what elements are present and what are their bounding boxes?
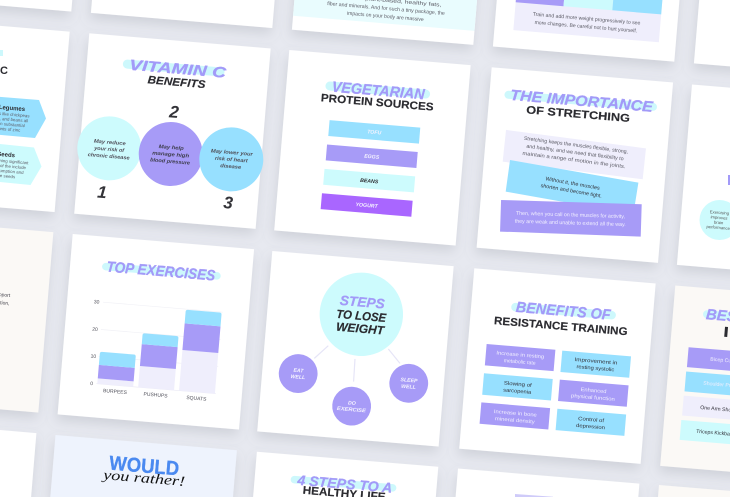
circle 2: [136, 119, 205, 189]
bar chart: PUSHUPS: [143, 391, 168, 400]
circle 1: May reduce: [94, 139, 126, 147]
card: nuts and seeds partial: fiber and minerals. And for such a tiny package, the: [327, 1, 445, 17]
card: progressive training partial: Train and add more weight progressively to see: [532, 12, 641, 27]
box: depression: [556, 409, 626, 436]
card: nuts and seeds partial: [292, 0, 488, 45]
text: beige card partial: [0, 291, 11, 307]
circle: do exercise: EXERCISE: [337, 406, 367, 414]
box 1: [502, 130, 647, 179]
card: zinc sources partial left: C: [0, 65, 8, 77]
card: vitamin c benefits: [72, 33, 273, 229]
card: importance of stretching: [477, 67, 673, 263]
main circle: [316, 269, 406, 359]
bar chart: SQUATS: [186, 395, 207, 403]
arrow left: [314, 345, 328, 359]
circle: eat well: WELL: [290, 374, 305, 381]
card: progressive training partial: [493, 0, 689, 62]
heading: WOULD: [108, 453, 180, 480]
number 2: 2: [168, 102, 180, 122]
arrow middle: [353, 359, 355, 382]
title highlight: [290, 476, 397, 492]
circle 2: manage high: [152, 150, 189, 160]
box: physical function: Enhanced: [580, 387, 607, 395]
circle 1: chronic disease: [87, 152, 130, 162]
bar chart: [86, 299, 223, 403]
title: THE IMPORTANCE: [510, 87, 655, 116]
title highlight: [511, 303, 616, 320]
card: would you rather: [50, 435, 237, 497]
bar: yogurt: YOGURT: [355, 202, 379, 210]
box: metabolic rate: metabolic rate: [503, 358, 536, 367]
main circle: TO LOSE: [336, 307, 388, 325]
box: sarcopenia: sarcopenia: [503, 388, 531, 396]
box: metabolic rate: Increase in resting: [496, 350, 544, 360]
card: progressive training partial: more changes. Be careful not to hurt yourself.: [534, 20, 637, 34]
box: bone density: mineral density: [495, 416, 535, 425]
card: steps to lose weight: [257, 251, 454, 447]
subtitle: RESISTANCE TRAINING: [493, 315, 628, 338]
subtitle: OF STRETCHING: [526, 104, 630, 125]
card: vegetarian protein sources: [274, 50, 471, 246]
circle: sleep well: WELL: [401, 384, 416, 391]
circle: do exercise: DO: [348, 400, 356, 407]
card: bottom-right partial: [658, 485, 730, 497]
box 2: Without it, the muscles: [545, 176, 601, 192]
box: sarcopenia: Slowing of: [504, 381, 533, 389]
circle: eat well: EAT: [293, 368, 304, 375]
card: top-left partial: [0, 0, 86, 12]
box: resting systolic: resting systolic: [576, 364, 615, 373]
box 1: and healthy, and we need that flexibility to: [526, 144, 624, 162]
circle 2: blood pressure: [150, 157, 190, 167]
row: one arm: [682, 396, 730, 428]
card: top exercises: [58, 234, 254, 430]
card: top partial: [91, 0, 287, 28]
circle: brain performance: [700, 200, 730, 240]
box: depression: depression: [576, 423, 605, 431]
number 3: 3: [223, 193, 234, 213]
text: brain performance: performance: [706, 224, 730, 231]
circle: sleep well: [388, 362, 430, 404]
bar: tofu: TOFU: [367, 129, 382, 136]
row: shoulder: [685, 372, 730, 404]
title fragment: [515, 494, 553, 497]
card: bottom partial: [456, 468, 639, 497]
box: metabolic rate: [485, 344, 555, 371]
title highlight: [123, 59, 225, 77]
circle 3: disease: [220, 163, 241, 171]
title highlight: [325, 81, 430, 99]
title: TOP EXERCISES: [106, 259, 216, 285]
title: BENEFITS OF: [515, 299, 612, 324]
script heading: you rather!: [100, 468, 186, 490]
bar: yogurt: [321, 193, 413, 217]
bar chart: 0: [90, 381, 94, 387]
box: resting systolic: Improvement in: [574, 357, 618, 367]
card: benefits of resistance training: [459, 268, 656, 464]
main circle: WEIGHT: [336, 320, 386, 338]
arrow right: [387, 349, 401, 363]
hexagon: seeds: [0, 143, 42, 185]
card: white partial bottom-left: [0, 430, 36, 497]
box: depression: Control of: [578, 416, 605, 424]
box 2: [505, 160, 639, 215]
box: bone density: [480, 402, 550, 430]
circle 2: May help: [159, 144, 184, 152]
subtitle: PROTEIN SOURCES: [320, 92, 434, 114]
box 3: Then, when you call on the muscles for activity,: [516, 211, 625, 220]
bar chart: 20: [92, 327, 98, 333]
partial title: [728, 175, 730, 185]
card: top-right partial exercising: [677, 84, 730, 280]
circle 3: May lower your: [211, 148, 254, 158]
bar: eggs: EGGS: [364, 154, 380, 161]
circle 1: [75, 114, 144, 183]
card: top-right partial: [694, 0, 730, 79]
box: physical function: physical function: [571, 393, 615, 403]
box 2: shorten and become tight.: [540, 183, 602, 200]
bar chart: 10: [90, 354, 97, 360]
box: physical function: [558, 380, 629, 407]
box 3: [498, 193, 643, 243]
main circle: STEPS: [339, 293, 385, 312]
title: VITAMIN C: [129, 57, 228, 82]
card: nuts and seeds partial: impacts on your body are massive: [347, 11, 424, 23]
row: triceps: [680, 420, 730, 452]
card: 4 steps to a healthy life: [253, 452, 438, 497]
circle: eat well: [277, 353, 319, 395]
bar: tofu: [328, 120, 420, 144]
number 1: 1: [97, 183, 108, 202]
text: brain performance: improves: [710, 214, 728, 221]
text: brain performance: [706, 209, 730, 231]
hexagon: legumes: [0, 96, 46, 138]
box: bone density: Increase in bone: [494, 409, 537, 419]
box: resting systolic: [560, 351, 631, 378]
title: VEGETARIAN: [331, 79, 426, 103]
text: legumes: [0, 104, 31, 133]
text: seeds: [0, 151, 30, 180]
circle 1: your risk of: [93, 146, 126, 154]
title: 4 STEPS TO A: [296, 472, 393, 496]
circle: sleep well: SLEEP: [400, 377, 418, 385]
subtitle: BENEFITS: [147, 74, 207, 91]
bar: beans: [323, 169, 415, 192]
bar chart: BURPEES: [103, 388, 128, 396]
title highlight: [703, 310, 730, 328]
box 1: maintain a range of motion in the joints.: [522, 151, 626, 170]
card: best exercises partial right: [660, 286, 730, 481]
title highlight: [102, 263, 221, 280]
text: brain performance: brain: [714, 220, 724, 225]
card: beige partial left: [0, 217, 53, 413]
bar: eggs: [326, 144, 418, 168]
bar chart: 30: [94, 299, 100, 306]
circle 3: risk of heart: [215, 156, 248, 164]
box 1: Stretching keeps the muscles flexible, strong,: [523, 136, 628, 155]
bar: beans: BEANS: [360, 178, 379, 185]
title highlight: [504, 90, 657, 111]
row: bicep: [687, 347, 730, 379]
text: brain performance: Exercising: [710, 209, 730, 216]
box: sarcopenia: [482, 373, 553, 400]
card: zinc sources partial left: [0, 16, 70, 212]
circle: do exercise: [331, 385, 373, 427]
box 3: they are weak and unable to extend all the way.: [515, 219, 626, 228]
circle 3: [197, 125, 266, 194]
subtitle: [724, 327, 728, 337]
